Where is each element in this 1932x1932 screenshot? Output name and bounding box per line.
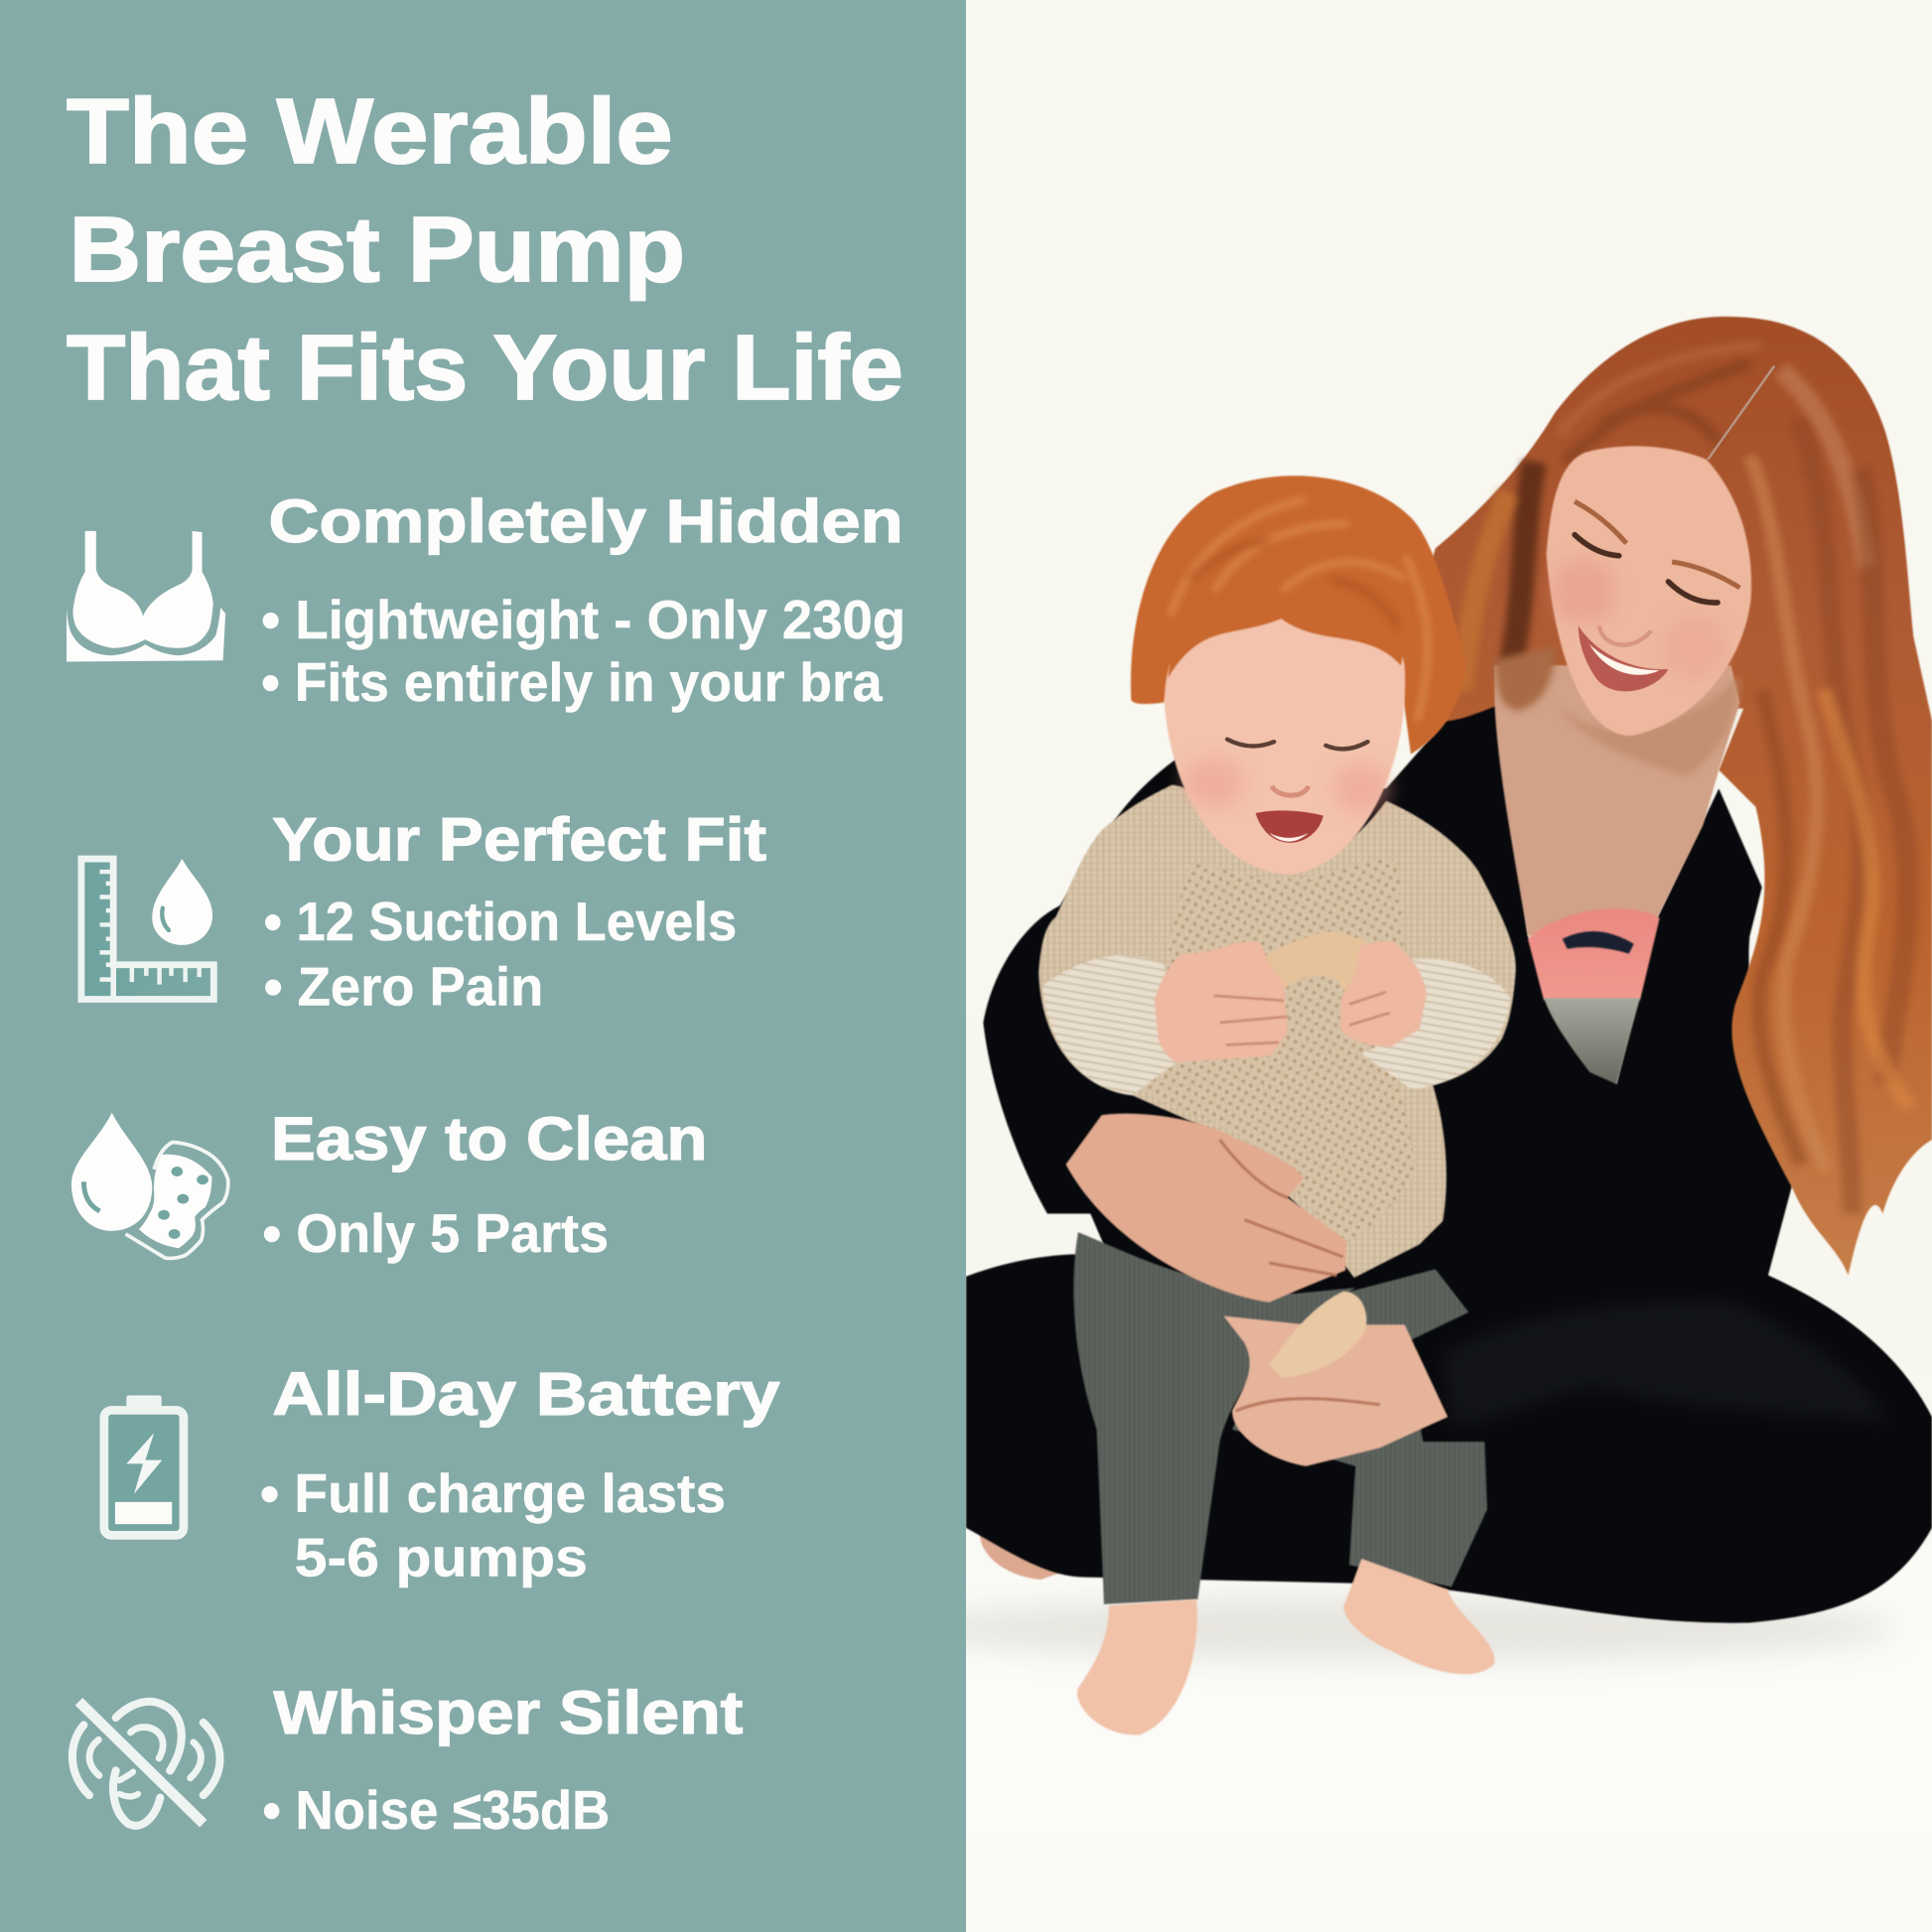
heading: your perfect fit: Your Perfect Fit xyxy=(272,805,766,873)
heading: easy to clean: Easy to Clean xyxy=(271,1105,707,1173)
baby's hair strands xyxy=(1171,499,1428,721)
feature: all-day battery xyxy=(104,1360,780,1587)
woman's black outfit xyxy=(966,665,1932,1623)
baby's feet xyxy=(1077,1559,1495,1735)
feature: whisper silent xyxy=(72,1679,743,1841)
heading: all-day battery: All-Day Battery xyxy=(272,1360,780,1428)
feature: easy to clean xyxy=(71,1105,707,1264)
woman's neck and chest xyxy=(1494,647,1739,936)
bullet list: your perfect fit xyxy=(264,892,737,1018)
woman's hand on baby xyxy=(1066,1114,1346,1303)
icon: ruler and drop xyxy=(81,859,213,1000)
baby's sweater xyxy=(1038,785,1516,1278)
title: That Fits Your Life xyxy=(67,316,903,419)
baby's hands xyxy=(1155,941,1427,1062)
woman's far foot xyxy=(980,1532,1072,1580)
bullet list: all-day battery: • Full charge lasts xyxy=(260,1463,726,1524)
wearable pump xyxy=(1528,908,1660,1084)
title: The Werable xyxy=(67,79,673,183)
bullet list: completely hidden: • Lightweight - Only 230g xyxy=(261,590,905,650)
woman's face xyxy=(1547,446,1751,736)
floor shadow xyxy=(911,1596,1897,1661)
bullet list: completely hidden: • Fits entirely in your bra xyxy=(261,652,883,713)
feature: your perfect fit xyxy=(81,805,766,1018)
wooden toy lower xyxy=(1269,1292,1366,1378)
baby's hair xyxy=(1131,476,1466,755)
woman's lower hand xyxy=(1223,1315,1448,1466)
icon: muted ear xyxy=(72,1702,220,1826)
woman's hair xyxy=(1421,317,1932,1276)
heading: completely hidden: Completely Hidden xyxy=(269,487,903,555)
bullet list: completely hidden xyxy=(261,590,905,713)
panel: features sidebar background xyxy=(0,0,966,1932)
baby's legs xyxy=(1073,1232,1487,1604)
icon: drop and sponge xyxy=(71,1113,228,1258)
feature: completely hidden xyxy=(67,487,905,713)
bullet list: your perfect fit: • 12 Suction Levels xyxy=(264,892,737,952)
bullet list: all-day battery xyxy=(260,1463,726,1587)
icon: bra xyxy=(67,531,225,661)
bullet list: whisper silent: • Noise ≤35dB xyxy=(262,1780,610,1841)
photo background xyxy=(966,0,1932,1932)
title: Breast Pump xyxy=(69,198,685,301)
icon: battery xyxy=(104,1396,184,1535)
baby's face xyxy=(1165,554,1417,875)
title xyxy=(67,79,903,419)
wooden toy upper xyxy=(1251,931,1376,1000)
heading: whisper silent: Whisper Silent xyxy=(274,1679,743,1746)
bullet list: your perfect fit: • Zero Pain xyxy=(264,957,543,1018)
bullet list: all-day battery: 5-6 pumps xyxy=(295,1527,588,1587)
bullet list: easy to clean: • Only 5 Parts xyxy=(262,1203,609,1264)
photo: mother and baby xyxy=(911,317,1932,1735)
